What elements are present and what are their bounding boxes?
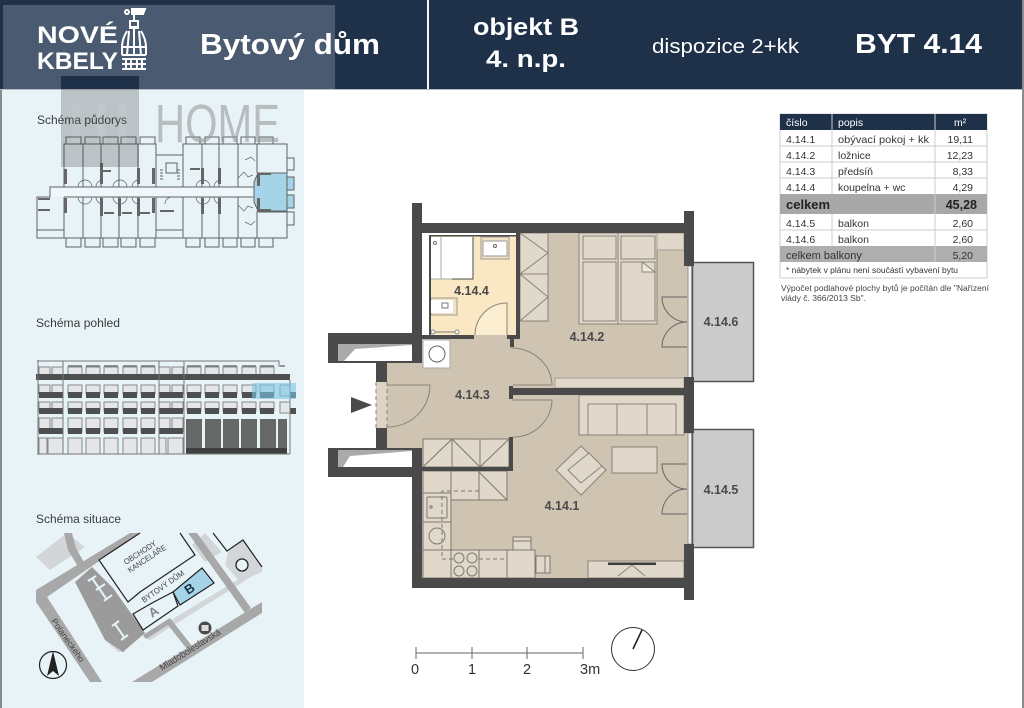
living room balcony doors: [662, 464, 687, 514]
schema: site map: [36, 533, 262, 682]
table header: [780, 114, 987, 130]
panel: left schema column: [2, 90, 304, 708]
compass: [612, 628, 654, 670]
interior doors: [387, 348, 552, 437]
table: room areas: 12,23: [947, 150, 973, 162]
table: room areas: [780, 114, 987, 278]
logo: Nové Kbely: KBELY: [37, 48, 118, 75]
heading: site schema: Schéma situace: [36, 514, 121, 526]
landmark outline: [213, 533, 262, 567]
apartment number: BYT 4.14: [855, 28, 982, 59]
icon: bus stop: [198, 622, 212, 634]
schema: building elevation: [36, 360, 296, 454]
bedroom balcony doors: [662, 297, 687, 347]
bed: [579, 233, 657, 324]
room labels: 4.14.5: [704, 483, 738, 497]
TV cabinet: [588, 561, 684, 578]
table: room areas: 19,11: [948, 134, 973, 146]
scale bar: 2: [523, 662, 531, 678]
apartment floor: [387, 233, 688, 578]
table: room areas: 2,60: [953, 234, 973, 246]
arrow: entrance: [351, 397, 372, 413]
map labels: A: [145, 602, 162, 621]
table: room areas: 4.14.6: [786, 234, 815, 246]
room labels: 4.14.4: [454, 284, 489, 298]
highlighted apartment: [254, 173, 294, 211]
coffee table: [612, 447, 657, 473]
table: room areas: 8,33: [953, 166, 973, 178]
walls: [328, 203, 694, 600]
commercial building: [99, 533, 195, 602]
table: room areas: koupelna + wc: [838, 182, 905, 194]
table: room areas: 4,29: [953, 182, 973, 194]
balconies top: [66, 137, 273, 144]
logo: Nové Kbely: NOVÉ: [37, 21, 118, 49]
logo: Nové Kbely: [37, 9, 146, 75]
building A: [133, 592, 178, 630]
scale bar: [411, 647, 600, 678]
neighbouring blocks: [75, 567, 145, 652]
map labels: KANCELÁŘE: [126, 543, 168, 575]
sofa: [579, 395, 684, 435]
table: room areas: 5,20: [953, 250, 973, 262]
map labels: [49, 539, 224, 674]
room labels: [454, 284, 738, 513]
layout type: dispozice 2+kk: [652, 36, 800, 58]
table header: číslo: [786, 117, 808, 129]
note: floor area calculation: Výpočet podlahové plochy bytů je počítán dle "Nařízení: [781, 284, 990, 293]
header bar: [0, 0, 1024, 90]
icon: north arrow: [40, 651, 66, 678]
watermark: HOME logo: HOME: [155, 94, 280, 154]
map labels: B: [181, 580, 198, 598]
note: floor area calculation: vlády č. 366/2013 Sb".: [781, 294, 866, 303]
nightstand and shelf: [555, 233, 684, 388]
service cores: [38, 163, 271, 216]
building B highlighted: [173, 568, 214, 605]
table: room areas: 2,60: [953, 218, 973, 230]
room: bathroom 4.14.4: [422, 233, 520, 335]
table: room areas: celkem: [786, 197, 830, 212]
room labels: 4.14.3: [455, 388, 490, 402]
entry threshold: [376, 382, 387, 428]
table: room areas: celkem balkony: [786, 250, 862, 262]
heading: Bytový dům: Bytový dům: [200, 29, 380, 61]
map labels: Mladoboleslavská: [158, 627, 224, 674]
roads: [36, 533, 262, 682]
schema: building floor plan: [37, 137, 294, 247]
table: room areas: 4.14.5: [786, 218, 815, 230]
map labels: OBCHODY: [122, 539, 159, 567]
room labels: 4.14.6: [704, 315, 738, 329]
map labels: BYTOVÝ DŮM: [140, 568, 186, 605]
object and floor: [473, 14, 579, 73]
door swings: [78, 157, 255, 187]
table: room areas: 4.14.3: [786, 166, 815, 178]
object and floor: 4. n.p.: [486, 46, 566, 73]
light ground areas: [36, 533, 262, 652]
table: room areas: balkon: [838, 234, 869, 246]
scale bar: 0: [411, 662, 419, 678]
table: room areas: 4.14.4: [786, 182, 815, 194]
scale bar: 1: [468, 662, 476, 678]
hall wardrobe: [423, 439, 509, 467]
heading: elevation schema: Schéma pohled: [36, 318, 120, 330]
washing machine: [423, 340, 450, 368]
table: room areas: předsíň: [838, 166, 873, 178]
scale bar: 3m: [580, 662, 600, 678]
table header: m²: [954, 117, 967, 129]
balcony 4.14.6: [692, 262, 754, 382]
map labels: Polaneckého: [49, 616, 87, 664]
room labels: 4.14.1: [545, 499, 579, 513]
table: room areas: ložnice: [838, 150, 871, 162]
balcony windows: [688, 266, 692, 544]
table: room areas: balkon: [838, 218, 869, 230]
note: floor area calculation: [781, 284, 990, 303]
bedroom wardrobe: [520, 233, 548, 321]
table header: popis: [838, 117, 863, 129]
balconies bottom: [66, 238, 273, 247]
object and floor: objekt B: [473, 14, 579, 41]
table: room areas: 4.14.1: [786, 134, 815, 146]
room labels: 4.14.2: [570, 330, 604, 344]
table: room areas: * nábytek v plánu není součástí vybavení bytu: [786, 266, 958, 275]
floor plan: [328, 203, 754, 600]
entry niche shading: [338, 344, 412, 467]
armchair: [556, 446, 606, 495]
table: room areas: obývací pokoj + kk: [838, 134, 930, 146]
heading: floor plan schema: Schéma půdorys: [37, 115, 127, 127]
kitchen: [423, 471, 550, 578]
watermark: HOME logo: [61, 76, 280, 167]
balcony 4.14.5: [692, 430, 754, 548]
table: room areas: 4.14.2: [786, 150, 815, 162]
table: room areas: 45,28: [946, 198, 977, 212]
